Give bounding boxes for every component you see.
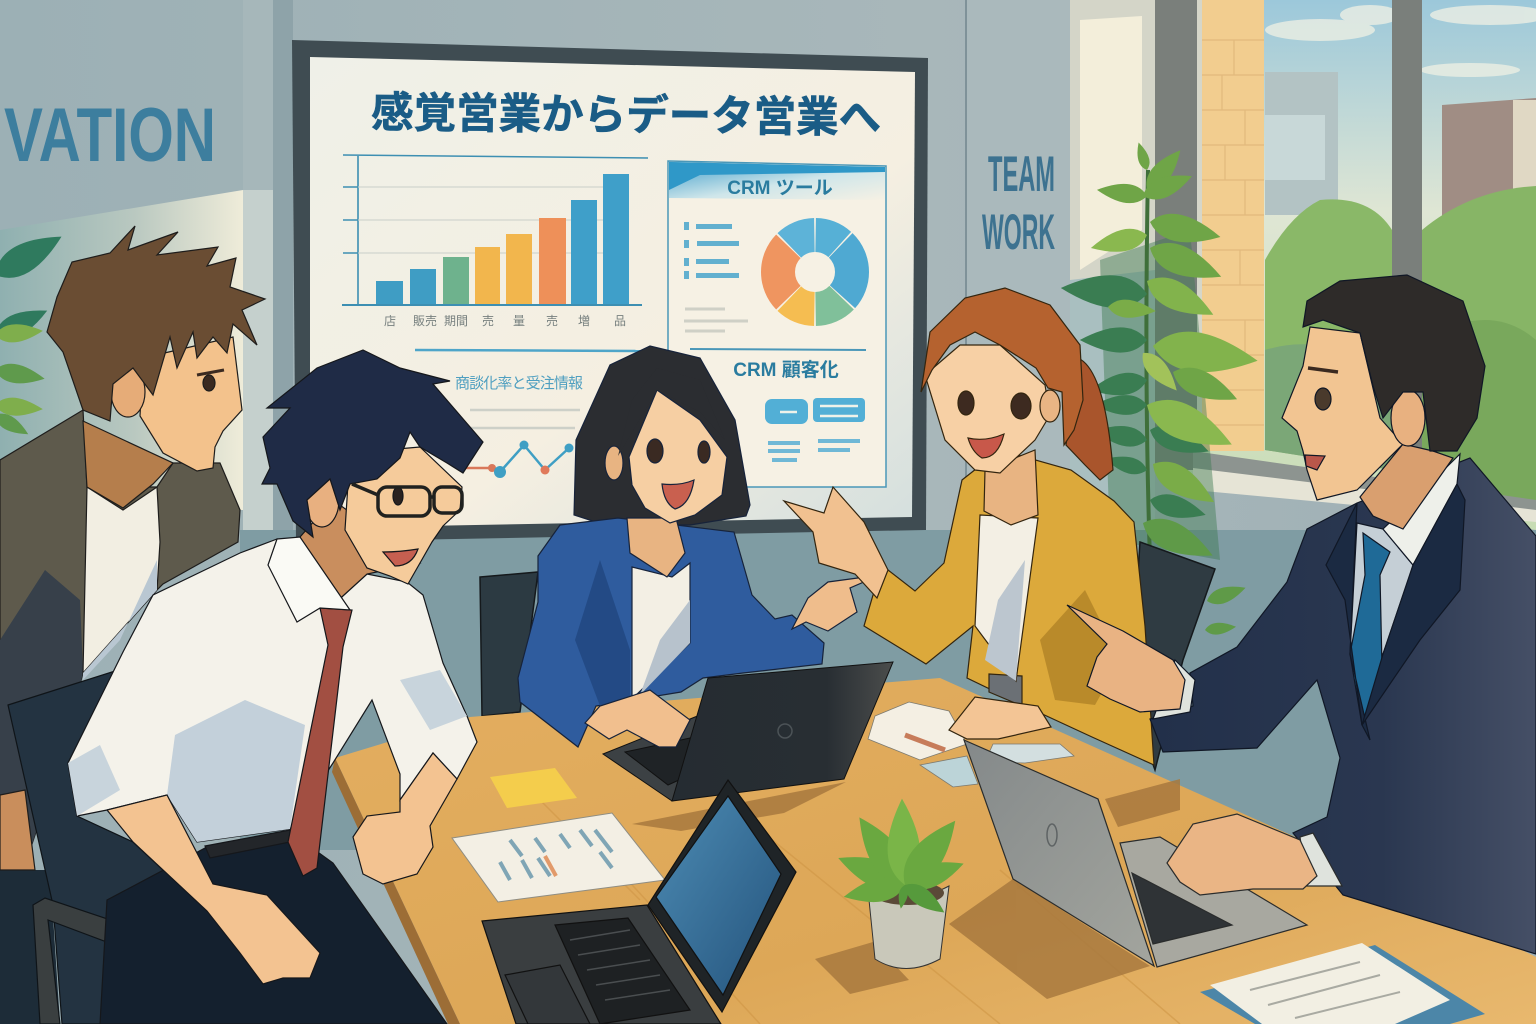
ear: [305, 473, 339, 527]
text: TEAM: [988, 146, 1055, 202]
neck: [300, 500, 420, 605]
ponytail: [1066, 358, 1113, 480]
legend list: [684, 222, 739, 279]
chairs behind people: [480, 542, 1215, 770]
hair: [262, 350, 483, 537]
shirt shadow: [167, 700, 305, 842]
bar chart: 店: [384, 314, 396, 328]
bar chart: 売: [546, 313, 558, 328]
bar chart: 品: [614, 314, 626, 328]
left office chair: [8, 671, 207, 1024]
bar chart: [342, 155, 648, 328]
person: man with brown hair: [0, 226, 265, 1024]
left wall plant: [0, 224, 69, 440]
wall text: TEAM WORK: [982, 146, 1055, 260]
shirt: [632, 563, 690, 699]
tie: [1350, 533, 1390, 725]
bar chart: 売: [482, 313, 494, 328]
hair back: [574, 346, 750, 525]
jacket shadow: [0, 570, 83, 880]
face: [1282, 327, 1403, 500]
sticky note: [490, 768, 577, 808]
right forearm and hand: [353, 753, 457, 884]
CRM section lower right: [690, 349, 866, 460]
line chart section: [415, 350, 640, 478]
collar: [268, 537, 350, 622]
eye: [393, 487, 403, 505]
suit: [1150, 458, 1536, 954]
left forearm: [107, 795, 320, 984]
belt: [205, 830, 290, 858]
wall text: VATION: VATION: [4, 93, 216, 178]
hair: [921, 288, 1083, 445]
face: [925, 345, 1050, 473]
cuff: [1300, 833, 1342, 886]
center laptop: [603, 662, 893, 801]
bar chart: 販売: [413, 313, 437, 328]
eyes: [958, 391, 974, 415]
blazer: [864, 450, 1154, 765]
face: [345, 447, 462, 584]
collar: [1383, 454, 1460, 565]
window with outside view: [1155, 0, 1536, 530]
hand on table: [949, 697, 1051, 739]
jacket: [0, 410, 240, 880]
neck: [627, 518, 685, 577]
bar chart: 増: [578, 314, 590, 328]
screen: [310, 57, 915, 528]
monitor with slide: [292, 40, 928, 542]
skirt: [989, 674, 1022, 706]
blazer shadow: [1040, 590, 1120, 705]
front laptop: [482, 780, 796, 1024]
mouth: [662, 480, 694, 509]
wood grain: [520, 780, 1180, 1024]
blazer shadow: [575, 560, 630, 706]
fringe: [618, 368, 725, 456]
right silver laptop: [964, 740, 1342, 967]
lapels: [1326, 503, 1370, 740]
person: woman in blue blazer: [518, 346, 880, 747]
CRM tool panel: CRM ツール: [727, 178, 833, 199]
neck: [83, 421, 173, 508]
tall office plant: [1060, 141, 1260, 636]
CRM section lower right: CRM 顧客化: [733, 359, 839, 381]
paper with bars: [452, 813, 665, 902]
shirt: [1350, 523, 1413, 654]
pointing hand: [784, 487, 888, 598]
mouth: [1305, 455, 1325, 470]
bar chart: 期間: [444, 314, 468, 328]
person: woman in yellow blazer: [784, 288, 1154, 765]
pointing hand: [1067, 605, 1185, 712]
hand: [0, 790, 35, 870]
mouth: [968, 434, 1004, 458]
ear: [605, 446, 623, 480]
cuff: [1153, 660, 1195, 719]
blazer: [518, 518, 824, 747]
face: [140, 337, 242, 471]
ear: [1391, 390, 1425, 446]
meeting table: [332, 678, 1536, 1024]
eye: [203, 375, 215, 391]
text: WORK: [982, 204, 1055, 260]
shirt: [68, 539, 477, 842]
hand on laptop: [585, 690, 690, 747]
person: man with glasses: [68, 350, 483, 1024]
CRM tool panel: [668, 161, 886, 487]
glasses: [352, 484, 462, 516]
ear: [111, 367, 145, 417]
desk documents: [868, 702, 1074, 787]
table shadows: [632, 779, 1180, 999]
neck: [1360, 444, 1453, 529]
donut chart: [778, 235, 852, 309]
monitor frame: [292, 40, 928, 542]
person: man in navy suit: [1067, 275, 1536, 954]
window frame: [1155, 0, 1422, 495]
eye: [1315, 388, 1331, 410]
pointing hand: [792, 575, 880, 631]
hair: [1303, 275, 1485, 451]
hair: [47, 226, 265, 421]
mouth: [383, 549, 418, 566]
ear: [1040, 390, 1060, 422]
face: [629, 390, 727, 523]
lower body: [0, 870, 60, 1024]
bar chart: 量: [513, 314, 525, 328]
shirt: [975, 515, 1038, 681]
potted plant on table: [833, 798, 968, 968]
trousers: [100, 832, 447, 1024]
tie: [288, 608, 352, 876]
hand on laptop: [1167, 814, 1317, 895]
line chart section: 商談化率と受注情報: [455, 375, 583, 392]
neck: [984, 450, 1038, 525]
clipboard with paper: [1200, 943, 1485, 1024]
shirt: [83, 487, 160, 673]
slide title: 感覚営業からデータ営業へ: [371, 89, 881, 142]
eyes: [647, 439, 663, 463]
